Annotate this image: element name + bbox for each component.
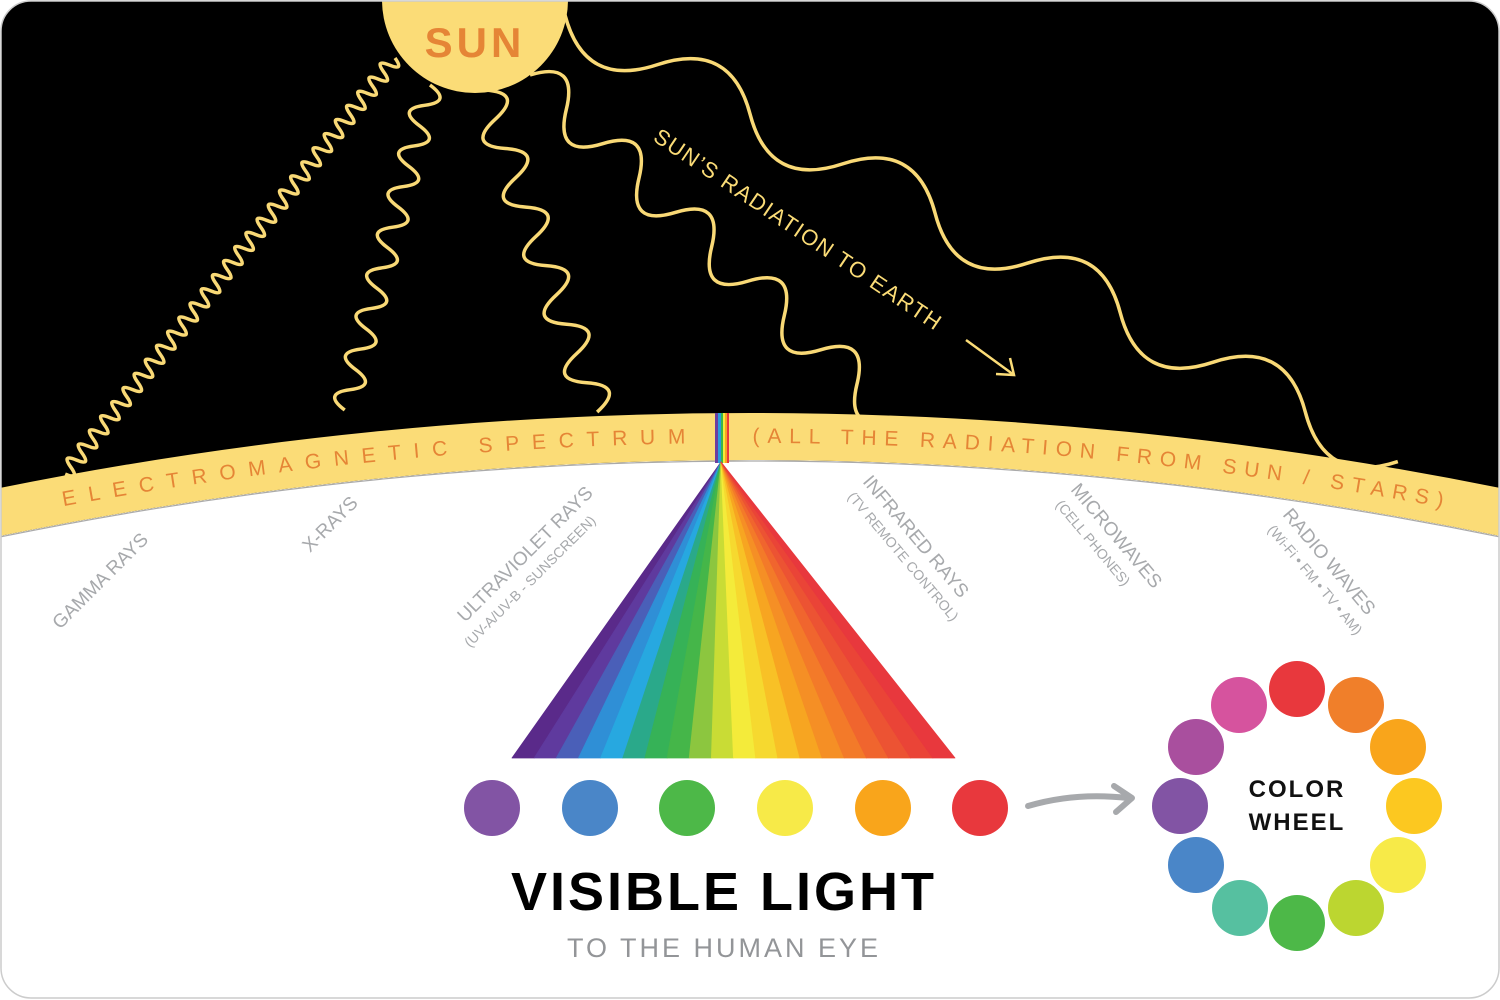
space background: [0, 0, 1500, 560]
prism spectrum triangle: [512, 462, 955, 758]
label: x-rays: X-RAYS: [299, 493, 363, 557]
label: infrared: INFRARED RAYS: [858, 472, 972, 602]
label: infrared: (TV REMOTE CONTROL): [845, 489, 962, 624]
radiation label with arrow: SUN’S RADIATION TO EARTH: [649, 123, 947, 336]
sun: [382, 0, 568, 93]
arrow to color wheel: [1028, 786, 1132, 812]
label: microwaves: MICROWAVES: [1066, 480, 1166, 593]
color wheel label: WHEEL: [1249, 809, 1345, 836]
radiation label with arrow: [649, 123, 1014, 375]
spectrum band: (ALL THE RADIATION FROM SUN / STARS): [754, 428, 1442, 511]
visible color dots: [464, 780, 1008, 836]
label: microwaves: (CELL PHONES): [1053, 497, 1134, 589]
sun: SUN: [425, 19, 525, 66]
wave: ultraviolet: [481, 90, 612, 414]
label: gamma rays: GAMMA RAYS: [49, 529, 153, 634]
band text: ELECTROMAGNETIC SPECTRUM: [62, 429, 684, 506]
subtitle: TO THE HUMAN EYE: [567, 933, 881, 963]
rainbow beam in band: [715, 413, 729, 463]
wave: radio: [552, 0, 1411, 486]
wave: gamma rays: [59, 53, 401, 479]
color wheel: [1152, 661, 1442, 951]
wave: x-rays: [332, 82, 443, 413]
title: visible light: VISIBLE LIGHT: [511, 862, 937, 922]
label: radio waves: RADIO WAVES: [1278, 505, 1379, 619]
earth white area: [2, 460, 1498, 560]
wave: infrared: [530, 70, 862, 415]
label: radio waves: (Wi-Fi • FM • TV • AM): [1265, 522, 1366, 638]
label: ultraviolet: (UV-A/UV-B - SUNSCREEN): [461, 512, 599, 650]
spectrum band: [2, 413, 1498, 538]
label: ultraviolet: ULTRAVIOLET RAYS: [454, 483, 597, 627]
color wheel label: COLOR: [1249, 776, 1345, 803]
